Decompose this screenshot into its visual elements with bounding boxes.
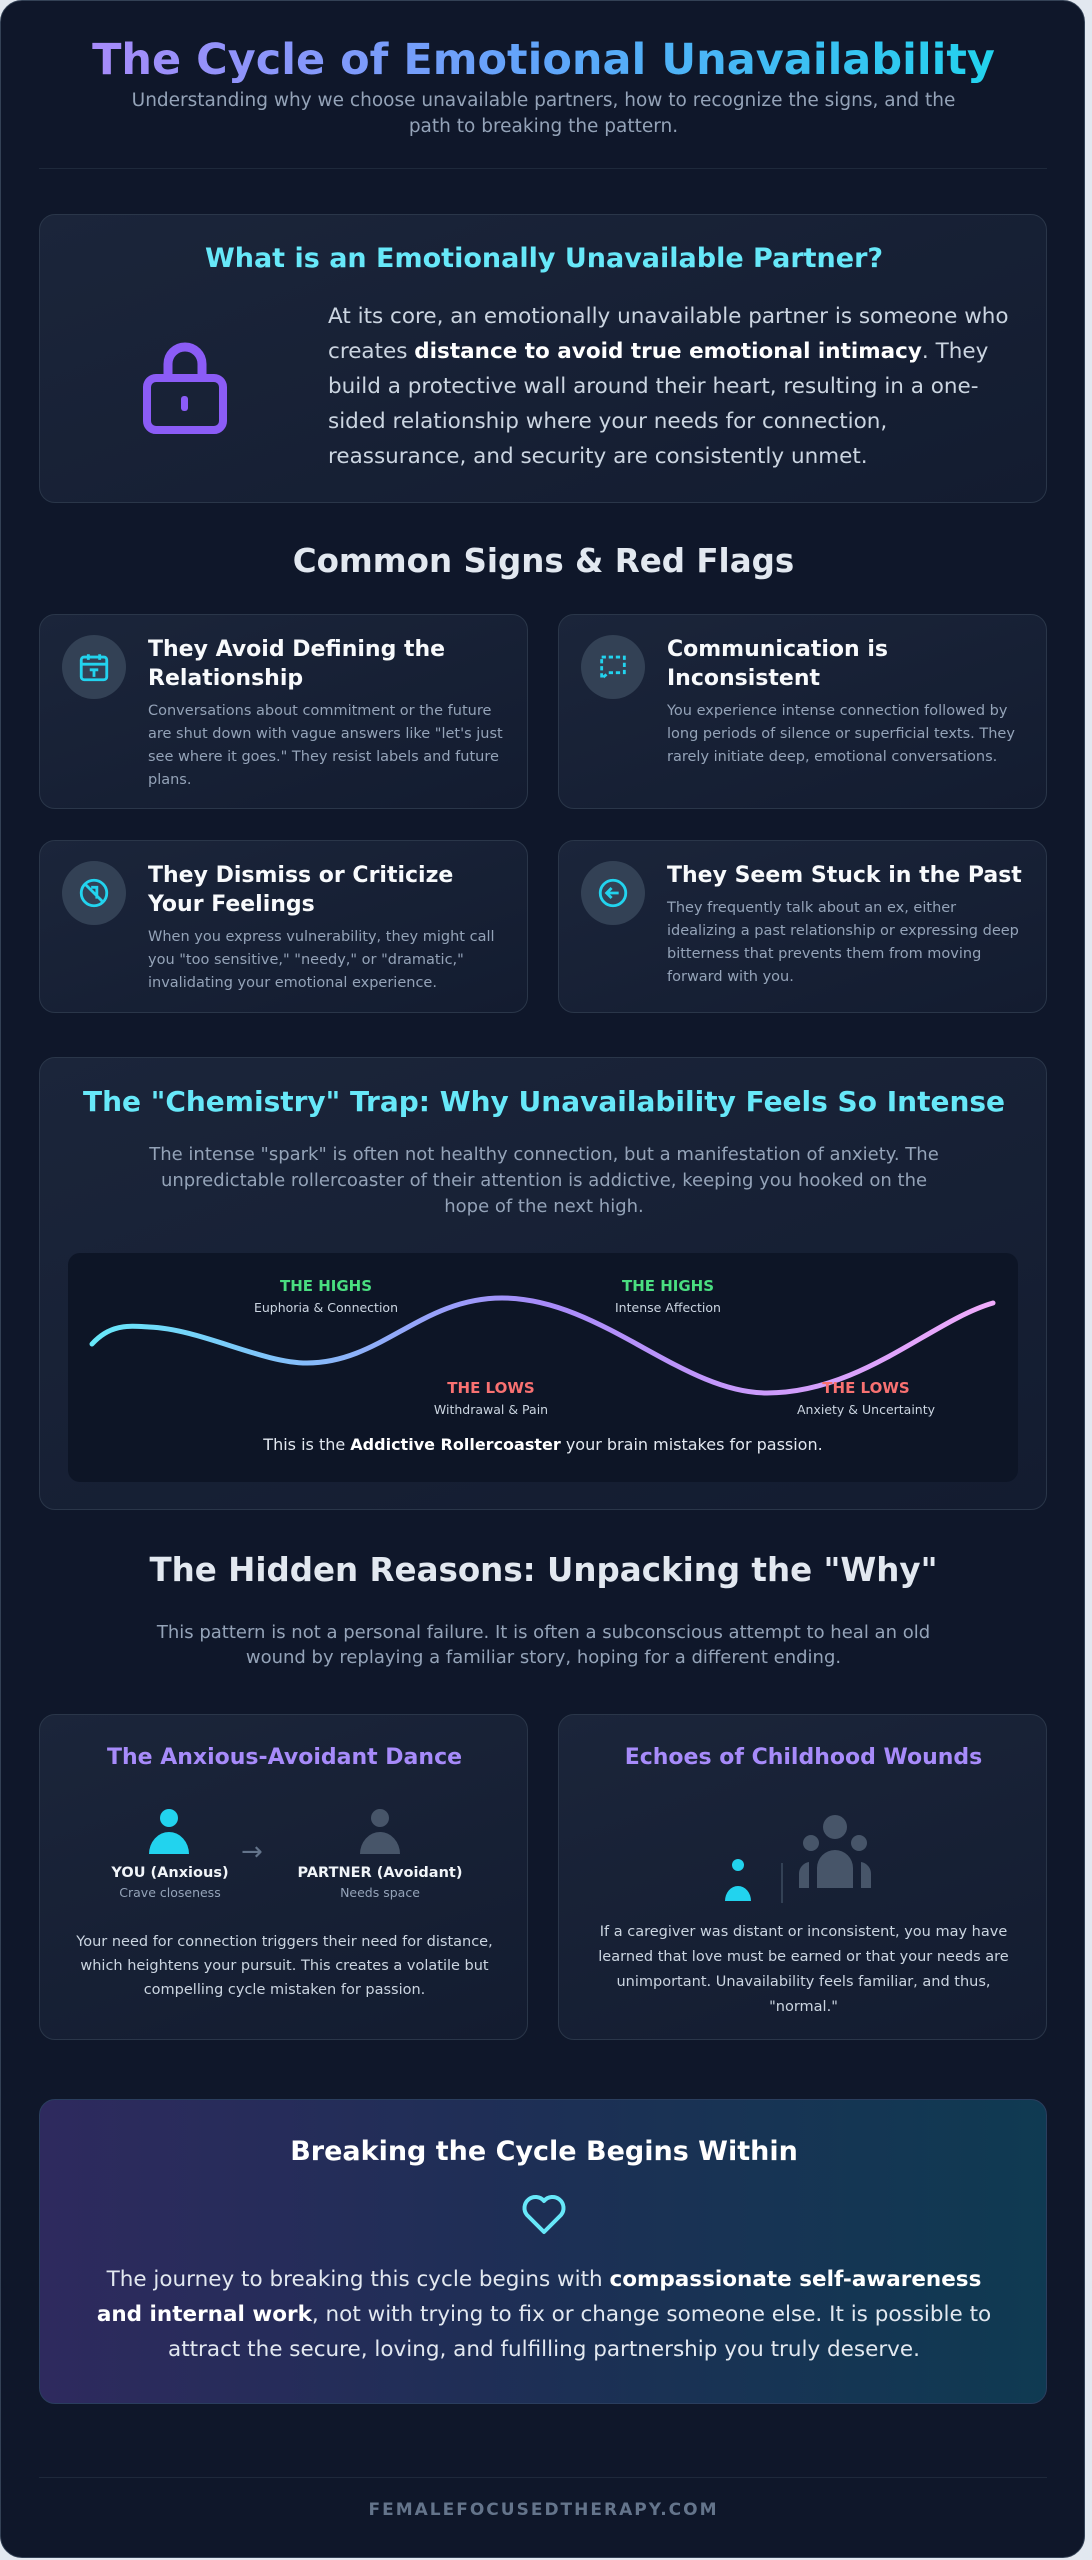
caption: rollercoaster: This is the Addictive Rollercoaster your brain mistakes for passion. <box>263 1435 823 1454</box>
text: hidden reasons: This pattern is not a personal failure. It is often a subconscious attempt to heal an old wound by replaying a familiar story, hoping for a different ending. <box>157 1622 930 1668</box>
arrow: → <box>241 1837 263 1867</box>
title: The Cycle of Emotional Unavailability <box>92 35 995 85</box>
label: partner: Needs space <box>340 1885 420 1900</box>
panel: anxious-avoidant <box>39 1714 528 2040</box>
panel: sign 2: Communication is Inconsistent <box>667 637 888 691</box>
label: highs 2 <box>615 1277 721 1315</box>
panel: sign 4 <box>558 840 1047 1013</box>
heading: definition: What is an Emotionally Unavailable Partner? <box>205 243 883 274</box>
label: partner: PARTNER (Avoidant) <box>298 1865 462 1881</box>
panel: sign 1: Conversations about commitment or the future are shut down with vague answers like "let's just see where it goes." They resist labels and future plans. <box>148 703 503 788</box>
subtitle: Understanding why we choose unavailable partners, how to recognize the signs, and the path to breaking the pattern. <box>132 90 955 137</box>
heading: childhood: Echoes of Childhood Wounds <box>625 1745 982 1770</box>
panel: definition <box>39 214 1047 503</box>
label: lows 1: Withdrawal & Pain <box>434 1402 548 1417</box>
heading: breaking: Breaking the Cycle Begins Within <box>290 2136 798 2167</box>
label: lows 2 <box>797 1379 935 1417</box>
label: you: Crave closeness <box>119 1885 221 1900</box>
icon: chat <box>581 635 645 699</box>
panel: sign 3: When you express vulnerability, they might call you "too sensitive," "needy," or "dramatic," invalidating your emotional experience. <box>148 929 495 991</box>
panel: sign 4: They frequently talk about an ex, either idealizing a past relationship or expressing deep bitterness that prevents them from moving forward with you. <box>667 900 1019 985</box>
text: definition: At its core, an emotionally unavailable partner is someone who creates distance to avoid true emotional intimacy. They build a protective wall around their heart, resulting in a one-sided relationship where your needs for connection, reassurance, and security are consistently unmet. <box>328 304 1009 469</box>
panel: chemistry trap <box>39 1057 1047 1510</box>
chart: rollercoaster <box>68 1253 1018 1482</box>
text: childhood: If a caregiver was distant or inconsistent, you may have learned that love must be earned or that your needs are unimportant. Unavailability feels familiar, and thus, "normal." <box>598 1924 1009 2015</box>
panel: sign 1 <box>39 614 528 809</box>
label: highs 2: THE HIGHS <box>622 1277 714 1295</box>
panel: childhood wounds <box>558 1714 1047 2040</box>
icon: blocked <box>62 861 126 925</box>
icon: back arrow <box>581 861 645 925</box>
panel: sign 3: They Dismiss or Criticize Your Feelings <box>148 863 453 917</box>
heading: signs: Common Signs & Red Flags <box>293 542 794 580</box>
panel: sign 4: They Seem Stuck in the Past <box>667 863 1022 888</box>
label: highs 1: Euphoria & Connection <box>254 1300 398 1315</box>
heading: chemistry: The "Chemistry" Trap: Why Unavailability Feels So Intense <box>83 1085 1005 1118</box>
text: dance: Your need for connection triggers their need for distance, which heightens your pursuit. This creates a volatile but compelling cycle mistaken for passion. <box>76 1934 493 1998</box>
label: you <box>111 1865 229 1900</box>
label: highs 1 <box>254 1277 398 1315</box>
icon: partner <box>360 1809 400 1854</box>
panel: sign 1: They Avoid Defining the Relationship <box>148 637 445 691</box>
footer: FEMALEFOCUSEDTHERAPY.COM <box>368 2500 718 2520</box>
label: highs 2: Intense Affection <box>615 1300 721 1315</box>
label: lows 1 <box>434 1379 548 1417</box>
label: you: YOU (Anxious) <box>111 1865 229 1881</box>
panel: sign 3 <box>39 840 528 1013</box>
text: chemistry: The intense "spark" is often not healthy connection, but a manifestation of anxiety. The unpredictable rollercoaster of their attention is addictive, keeping you hooked on the hope of the next high. <box>149 1144 939 1217</box>
icon: you <box>149 1809 189 1854</box>
icon: child and family <box>725 1815 871 1903</box>
label: partner <box>298 1865 462 1900</box>
icon: lock <box>143 342 227 434</box>
panel: breaking the cycle <box>39 2099 1047 2404</box>
label: lows 1: THE LOWS <box>447 1379 535 1397</box>
heading: hidden reasons: The Hidden Reasons: Unpacking the "Why" <box>149 1551 938 1589</box>
heading: dance: The Anxious-Avoidant Dance <box>107 1745 462 1770</box>
icon: calendar <box>62 635 126 699</box>
icon: heart <box>522 2195 566 2234</box>
panel: sign 2: You experience intense connection followed by long periods of silence or superficial texts. They rarely initiate deep, emotional conversations. <box>667 703 1015 765</box>
label: lows 2: Anxiety & Uncertainty <box>797 1402 935 1417</box>
panel: sign 2 <box>558 614 1047 809</box>
label: lows 2: THE LOWS <box>822 1379 910 1397</box>
label: highs 1: THE HIGHS <box>280 1277 372 1295</box>
text: breaking: The journey to breaking this cycle begins with compassionate self-awareness and internal work, not with trying to fix or change someone else. It is possible to attract the secure, loving, and fulfilling partnership you truly deserve. <box>97 2267 991 2362</box>
